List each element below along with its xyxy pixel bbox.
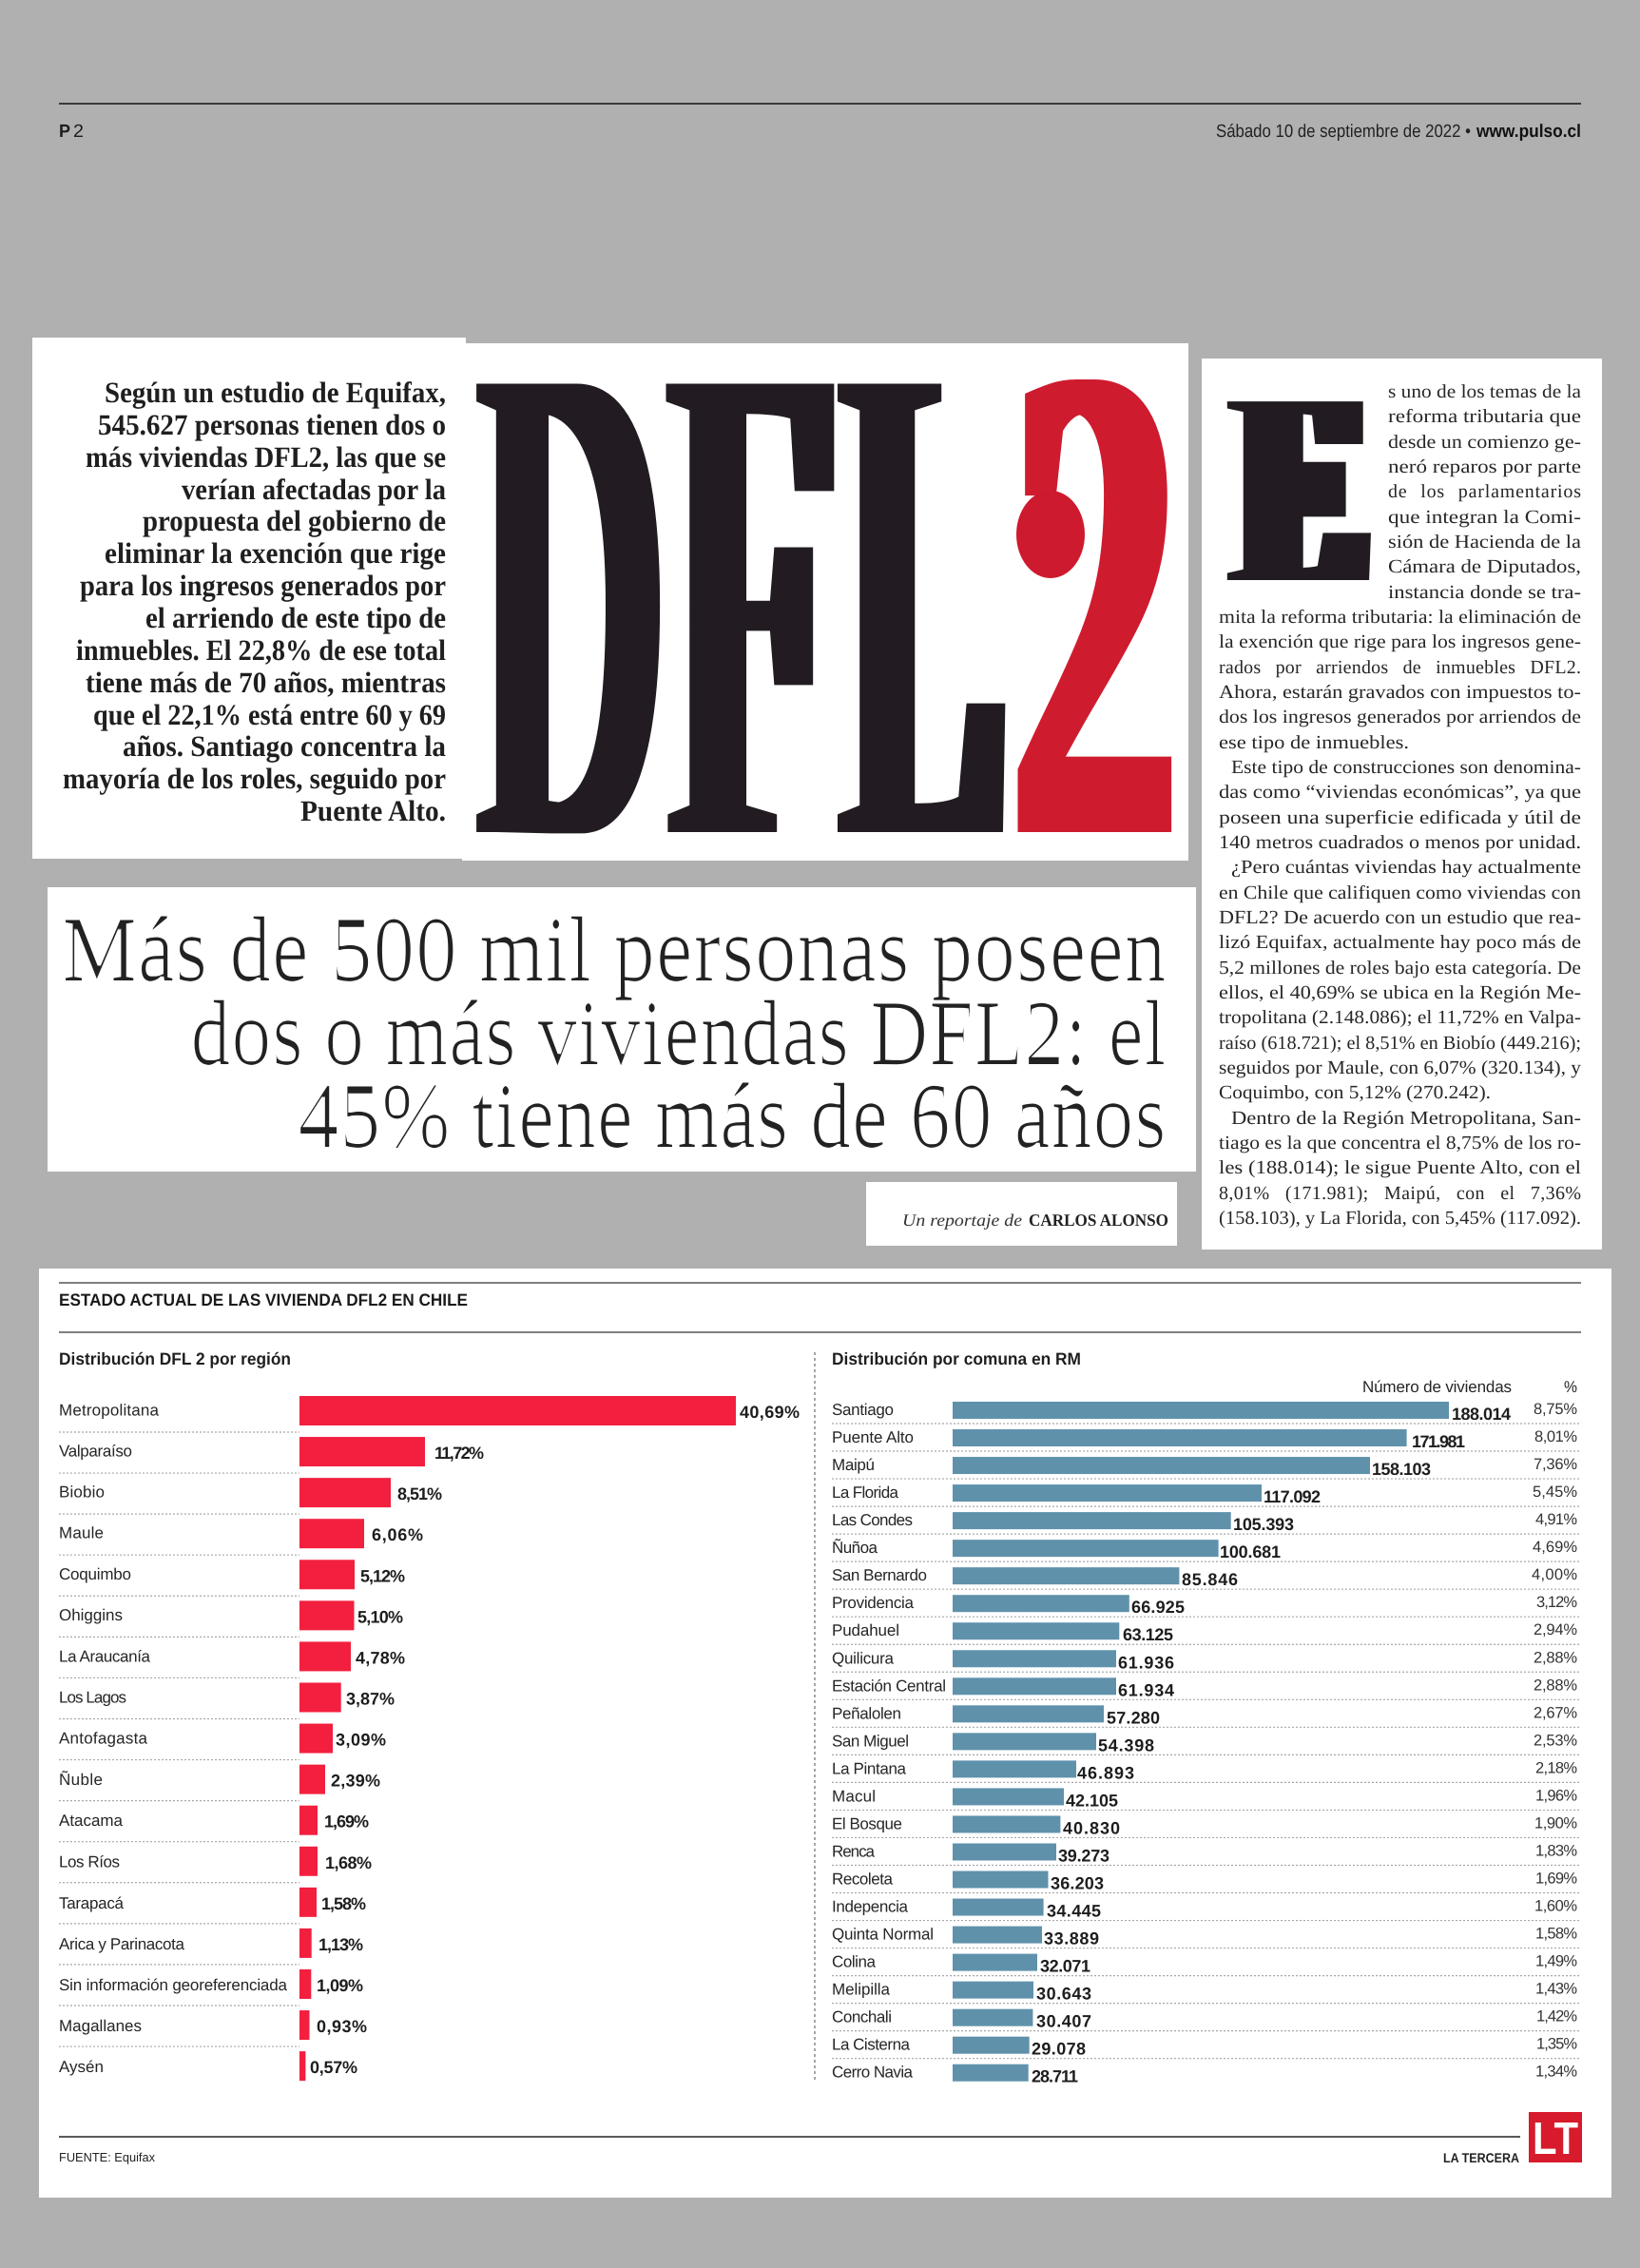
row: Coquimbo — [59, 1560, 405, 1596]
row: Indepencia: 34.445 — [1047, 1902, 1101, 1921]
row: Atacama — [59, 1806, 369, 1842]
row: Tarapacá — [59, 1888, 366, 1924]
row: La Araucanía: 4,78% — [356, 1648, 405, 1667]
panel: main headline — [48, 887, 1196, 1172]
panel: intro text: eliminar la exención que rige — [105, 536, 446, 570]
row: Maipú — [832, 1456, 1580, 1479]
page header: Sábado 10 de septiembre de 2022 • — [1216, 122, 1471, 142]
row: Recoleta — [832, 1871, 1580, 1893]
article text: Coquimbo, con 5,12% (270.242). — [1219, 1082, 1491, 1103]
row: Quinta Normal: Quinta Normal — [832, 1926, 934, 1944]
row: El Bosque: 40.830 — [1063, 1818, 1120, 1837]
row: Peñalolen: Peñalolen — [832, 1704, 901, 1722]
panel: DFL2 lettering: L — [845, 222, 1006, 980]
row: Quinta Normal: 1,58% — [1535, 1926, 1577, 1943]
row: Biobio: Biobio — [59, 1483, 105, 1502]
row: Antofagasta: 3,09% — [336, 1731, 386, 1750]
row: Quinta Normal — [832, 1926, 1580, 1948]
row: Conchali — [832, 2008, 1580, 2031]
row: Quilicura: 2,88% — [1534, 1649, 1577, 1666]
row: Ñuñoa: Ñuñoa — [832, 1539, 878, 1557]
article text — [1219, 381, 1581, 1229]
row: San Bernardo: 4,00% — [1532, 1566, 1577, 1583]
panel: intro text: que el 22,1% está entre 60 y 69 — [93, 698, 446, 731]
row: Biobio — [59, 1478, 442, 1514]
brand name: LA TERCERA — [1443, 2150, 1519, 2165]
row: Colina: 32.071 — [1040, 1957, 1090, 1976]
row: Ñuble — [59, 1765, 380, 1801]
row: Maule: Maule — [59, 1524, 104, 1542]
panel: intro text: mayoría de los roles, seguido por — [63, 762, 446, 795]
row: San Miguel: 2,53% — [1534, 1732, 1577, 1749]
row: Pudahuel: 63.125 — [1123, 1625, 1173, 1644]
row: Valparaíso: Valparaíso — [59, 1443, 132, 1461]
article text: neró reparos por parte — [1388, 456, 1581, 477]
panel: intro text — [32, 338, 466, 859]
row: Santiago: 8,75% — [1534, 1401, 1577, 1418]
row: Providencia: 66.925 — [1131, 1598, 1185, 1617]
row: Renca — [832, 1842, 1580, 1865]
row: Estación Central — [832, 1677, 1580, 1699]
row: Puente Alto: Puente Alto — [832, 1428, 914, 1446]
row: Metropolitana — [59, 1396, 800, 1432]
row: La Cisterna: 29.078 — [1032, 2040, 1086, 2059]
article text: dos los ingresos generados por arriendos de — [1219, 707, 1581, 727]
panel: article body — [1202, 338, 1602, 1250]
row: Renca: 1,83% — [1535, 1842, 1577, 1859]
row: San Miguel: 54.398 — [1098, 1735, 1154, 1754]
row: Indepencia: 1,60% — [1534, 1898, 1577, 1915]
article text: raíso (618.721); el 8,51% en Biobío (449.216); — [1219, 1033, 1581, 1054]
row: Valparaíso: 11,72% — [434, 1444, 484, 1463]
row: La Pintana: 2,18% — [1535, 1759, 1577, 1776]
row: La Florida: 5,45% — [1533, 1483, 1577, 1501]
article text: Cámara de Diputados, — [1388, 556, 1581, 577]
row: Peñalolen — [832, 1704, 1580, 1727]
chart section title: ESTADO ACTUAL DE LAS VIVIENDA DFL2 EN CHILE — [59, 1290, 468, 1309]
article text: ellos, el 40,69% se ubica en la Región Me- — [1219, 982, 1581, 1003]
row: Colina — [832, 1953, 1580, 1976]
article text: que integran la Comi- — [1388, 507, 1581, 528]
page header: 2 — [73, 122, 84, 142]
row: Las Condes: 4,91% — [1535, 1511, 1577, 1528]
article text: Ahora, estarán gravados con impuestos to- — [1219, 682, 1581, 703]
article text: 5,2 millones de roles bajo esta categoría. De — [1219, 958, 1581, 979]
row: Sin información georeferenciada: Sin información georeferenciada — [59, 1976, 288, 1994]
row: Sin información georeferenciada: 1,09% — [317, 1976, 363, 1995]
row: Indepencia: Indepencia — [832, 1898, 909, 1916]
article text: 140 metros cuadrados o menos por unidad. — [1219, 832, 1581, 853]
row: Arica y Parinacota: Arica y Parinacota — [59, 1935, 185, 1953]
row: Atacama: 1,69% — [324, 1812, 369, 1832]
panel: charts — [39, 1269, 1611, 2198]
row: Estación Central: 61.934 — [1118, 1680, 1174, 1699]
row: El Bosque: 1,90% — [1534, 1814, 1577, 1832]
row: Los Lagos: Los Lagos — [59, 1688, 126, 1706]
chart heading: Distribución por comuna en RM — [832, 1349, 1081, 1368]
row: Aysén: Aysén — [59, 2058, 104, 2076]
row: El Bosque — [832, 1814, 1580, 1837]
panel: byline: Un reportaje de — [902, 1211, 1022, 1230]
row: Recoleta: 36.203 — [1051, 1874, 1104, 1893]
article text: mita la reforma tributaria: la eliminación de — [1219, 607, 1581, 628]
row: Ñuñoa — [832, 1539, 1580, 1561]
panel: intro text: inmuebles. El 22,8% de ese total — [76, 633, 446, 667]
panel: main headline: Más de 500 mil personas poseen — [62, 899, 1167, 1000]
row: Ñuble: 2,39% — [331, 1772, 380, 1791]
row: Ñuñoa: 100.681 — [1220, 1542, 1281, 1561]
row: Maule — [59, 1519, 423, 1555]
panel: intro text: Puente Alto. — [300, 794, 446, 827]
row: Conchali: 1,42% — [1536, 2008, 1577, 2026]
row: Melipilla — [832, 1981, 1580, 2004]
row: Maule: 6,06% — [372, 1525, 423, 1544]
page header: P — [59, 122, 70, 142]
bar chart: distribution by comuna — [832, 1349, 1580, 2086]
panel: DFL2 lettering: D — [485, 222, 654, 980]
row: Ohiggins: Ohiggins — [59, 1606, 123, 1624]
row: Atacama: Atacama — [59, 1812, 124, 1830]
row: El Bosque: El Bosque — [832, 1814, 902, 1832]
row: Ohiggins: 5,10% — [357, 1607, 403, 1626]
row: La Florida: La Florida — [832, 1483, 899, 1502]
article text: ese tipo de inmuebles. — [1219, 732, 1409, 753]
panel: DFL2 lettering: F — [673, 222, 829, 980]
row: Colina: 1,49% — [1535, 1953, 1577, 1970]
row: Puente Alto: 171.981 — [1412, 1432, 1465, 1451]
bar chart: distribution by region — [59, 1349, 800, 2081]
article text: 8,01% (171.981); Maipú, con el 7,36% — [1219, 1183, 1581, 1204]
row: Arica y Parinacota — [59, 1929, 363, 1965]
panel: intro text: el arriendo de este tipo de — [145, 601, 446, 634]
row: Sin información georeferenciada — [59, 1969, 363, 2006]
row: Metropolitana: Metropolitana — [59, 1402, 160, 1419]
row: Cerro Navia: Cerro Navia — [832, 2064, 914, 2082]
row: Magallanes: Magallanes — [59, 2017, 142, 2035]
row: Las Condes: Las Condes — [832, 1511, 913, 1529]
row: Los Ríos: Los Ríos — [59, 1852, 120, 1871]
article text: ¿Pero cuántas viviendas hay actualmente — [1231, 857, 1581, 878]
row: Quilicura: Quilicura — [832, 1649, 895, 1667]
row: Santiago — [832, 1401, 1580, 1424]
row: La Pintana — [832, 1759, 1580, 1782]
row: Biobio: 8,51% — [397, 1484, 442, 1503]
row: San Miguel: San Miguel — [832, 1732, 909, 1750]
panel: intro text: tiene más de 70 años, mientras — [86, 666, 446, 699]
column header: number of homes: Número de viviendas — [1362, 1378, 1512, 1396]
panel: byline: CARLOS ALONSO — [1029, 1211, 1168, 1230]
row: Las Condes — [832, 1511, 1580, 1534]
row: Coquimbo: Coquimbo — [59, 1565, 131, 1583]
row: Los Ríos: 1,68% — [325, 1853, 372, 1872]
row: La Araucanía — [59, 1641, 405, 1677]
row: Valparaíso — [59, 1437, 484, 1473]
article text: de los parlamentarios — [1388, 481, 1581, 502]
row: San Bernardo: 85.846 — [1182, 1570, 1238, 1589]
row: Melipilla: 30.643 — [1036, 1985, 1091, 2004]
row: Pudahuel: Pudahuel — [832, 1621, 899, 1639]
row: Maipú: Maipú — [832, 1456, 875, 1474]
row: Pudahuel: 2,94% — [1534, 1621, 1577, 1638]
article text: en Chile que califiquen como viviendas con — [1219, 882, 1581, 903]
row: Cerro Navia: 28.711 — [1032, 2067, 1078, 2086]
logo: LT: LT — [1533, 2114, 1578, 2164]
panel: intro text: más viviendas DFL2, las que se — [86, 440, 446, 474]
row: Macul: 42.105 — [1066, 1791, 1118, 1810]
row: San Miguel — [832, 1732, 1580, 1754]
article text: desde un comienzo ge- — [1388, 432, 1581, 453]
row: Renca: Renca — [832, 1842, 876, 1860]
row: Santiago: 188.014 — [1452, 1405, 1511, 1424]
row: Recoleta: 1,69% — [1535, 1871, 1577, 1888]
article text: (158.103), y La Florida, con 5,45% (117.092). — [1219, 1208, 1581, 1229]
row: Cerro Navia: 1,34% — [1535, 2064, 1577, 2081]
article text: tiago es la que concentra el 8,75% de los ro- — [1219, 1133, 1581, 1153]
panel: intro text: Según un estudio de Equifax, — [105, 376, 446, 409]
panel: DFL2 lettering — [462, 222, 1188, 980]
panel: DFL2 lettering: 2 — [1013, 223, 1177, 980]
row: Puente Alto — [832, 1428, 1580, 1451]
row: La Cisterna: La Cisterna — [832, 2036, 911, 2054]
row: La Florida: 117.092 — [1264, 1487, 1321, 1506]
row: Magallanes — [59, 2010, 367, 2046]
row: Cerro Navia — [832, 2064, 1577, 2086]
row: Puente Alto: 8,01% — [1534, 1428, 1577, 1445]
page header — [59, 104, 1581, 142]
panel: main headline: dos o más viviendas DFL2: el — [190, 982, 1167, 1084]
row: La Florida — [832, 1483, 1580, 1506]
row: Los Lagos: 3,87% — [346, 1689, 395, 1708]
row: Antofagasta — [59, 1724, 386, 1760]
row: Los Lagos — [59, 1682, 395, 1718]
row: Metropolitana: 40,69% — [740, 1403, 800, 1422]
panel: byline — [866, 1182, 1177, 1246]
article text: rados por arriendos de inmuebles DFL2. — [1219, 657, 1581, 678]
row: La Pintana: La Pintana — [832, 1759, 907, 1777]
panel: intro text: años. Santiago concentra la — [123, 729, 446, 763]
article text: Este tipo de construcciones son denomina- — [1231, 757, 1581, 778]
panel: intro text: propuesta del gobierno de — [143, 504, 446, 537]
article text: lizó Equifax, actualmente hay poco más de — [1219, 932, 1581, 953]
row: La Cisterna: 1,35% — [1536, 2036, 1577, 2053]
row: Tarapacá: 1,58% — [321, 1894, 366, 1913]
row: Antofagasta: Antofagasta — [59, 1730, 148, 1748]
row: Renca: 39.273 — [1058, 1846, 1109, 1865]
row: San Bernardo: San Bernardo — [832, 1566, 927, 1584]
row: Macul — [832, 1787, 1580, 1810]
row: Coquimbo: 5,12% — [360, 1566, 405, 1585]
row: Providencia: 3,12% — [1536, 1594, 1577, 1611]
source: FUENTE: Equifax — [59, 2150, 155, 2164]
row: Macul: 1,96% — [1535, 1787, 1577, 1804]
article text: la exención que rige para los ingresos gene- — [1219, 631, 1581, 652]
row: San Bernardo — [832, 1566, 1580, 1589]
row: Maipú: 158.103 — [1372, 1460, 1431, 1479]
row: Maipú: 7,36% — [1534, 1456, 1577, 1473]
row: Conchali: Conchali — [832, 2008, 892, 2026]
page header: www.pulso.cl — [1476, 122, 1581, 142]
article text: reforma tributaria que — [1388, 406, 1581, 427]
row: Quinta Normal: 33.889 — [1044, 1929, 1099, 1948]
row: Peñalolen: 57.280 — [1107, 1708, 1160, 1727]
article text: s uno de los temas de la — [1388, 381, 1581, 402]
row: Estación Central: Estación Central — [832, 1677, 946, 1695]
row: Melipilla: Melipilla — [832, 1981, 891, 1999]
row: Melipilla: 1,43% — [1535, 1981, 1577, 1998]
row: Ñuñoa: 4,69% — [1533, 1539, 1577, 1556]
row: Conchali: 30.407 — [1036, 2012, 1091, 2031]
article text: les (188.014); le sigue Puente Alto, con el — [1219, 1157, 1581, 1178]
row: Pudahuel — [832, 1621, 1580, 1644]
row: Providencia: Providencia — [832, 1594, 915, 1612]
row: Aysén: 0,57% — [310, 2058, 357, 2077]
article text: Dentro de la Región Metropolitana, San- — [1231, 1108, 1581, 1129]
panel: intro text: verían afectadas por la — [182, 473, 446, 506]
article text: DFL2? De acuerdo con un estudio que rea- — [1219, 907, 1581, 928]
article text: poseen una superficie edificada y útil de — [1219, 807, 1581, 828]
article text: instancia donde se tra- — [1388, 582, 1581, 603]
column header: percent: % — [1564, 1378, 1577, 1396]
row: Peñalolen: 2,67% — [1534, 1704, 1577, 1721]
panel: intro text: 545.627 personas tienen dos o — [98, 408, 446, 441]
row: Estación Central: 2,88% — [1534, 1677, 1577, 1694]
article text: sión de Hacienda de la — [1388, 532, 1581, 552]
row: La Pintana: 46.893 — [1077, 1763, 1134, 1782]
row: Recoleta: Recoleta — [832, 1871, 894, 1889]
row: Quilicura: 61.936 — [1118, 1653, 1174, 1672]
row: Quilicura — [832, 1649, 1580, 1672]
row: Ñuble: Ñuble — [59, 1771, 103, 1789]
row: Indepencia — [832, 1898, 1580, 1921]
drop cap: E — [1243, 338, 1360, 640]
row: Arica y Parinacota: 1,13% — [318, 1935, 363, 1954]
chart heading: Distribución DFL 2 por región — [59, 1349, 291, 1368]
article text: tropolitana (2.148.086); el 11,72% en Valpa- — [1219, 1007, 1581, 1028]
row: Tarapacá: Tarapacá — [59, 1894, 125, 1912]
article text: seguidos por Maule, con 6,07% (320.134), y — [1219, 1057, 1581, 1078]
row: Ohiggins — [59, 1600, 403, 1637]
row: Aysén — [59, 2051, 357, 2081]
row: La Cisterna — [832, 2036, 1580, 2059]
footer — [59, 2112, 1582, 2165]
row: Providencia — [832, 1594, 1580, 1617]
article text: das como “viviendas económicas”, ya que — [1219, 782, 1581, 803]
row: Las Condes: 105.393 — [1233, 1515, 1294, 1534]
row: Magallanes: 0,93% — [317, 2017, 367, 2036]
row: Santiago: Santiago — [832, 1401, 894, 1419]
row: Los Ríos — [59, 1847, 372, 1883]
panel: intro text: para los ingresos generados por — [80, 569, 446, 602]
row: La Araucanía: La Araucanía — [59, 1647, 151, 1665]
row: Colina: Colina — [832, 1953, 877, 1971]
panel: main headline: 45% tiene más de 60 años — [298, 1065, 1167, 1167]
row: Macul: Macul — [832, 1787, 876, 1805]
